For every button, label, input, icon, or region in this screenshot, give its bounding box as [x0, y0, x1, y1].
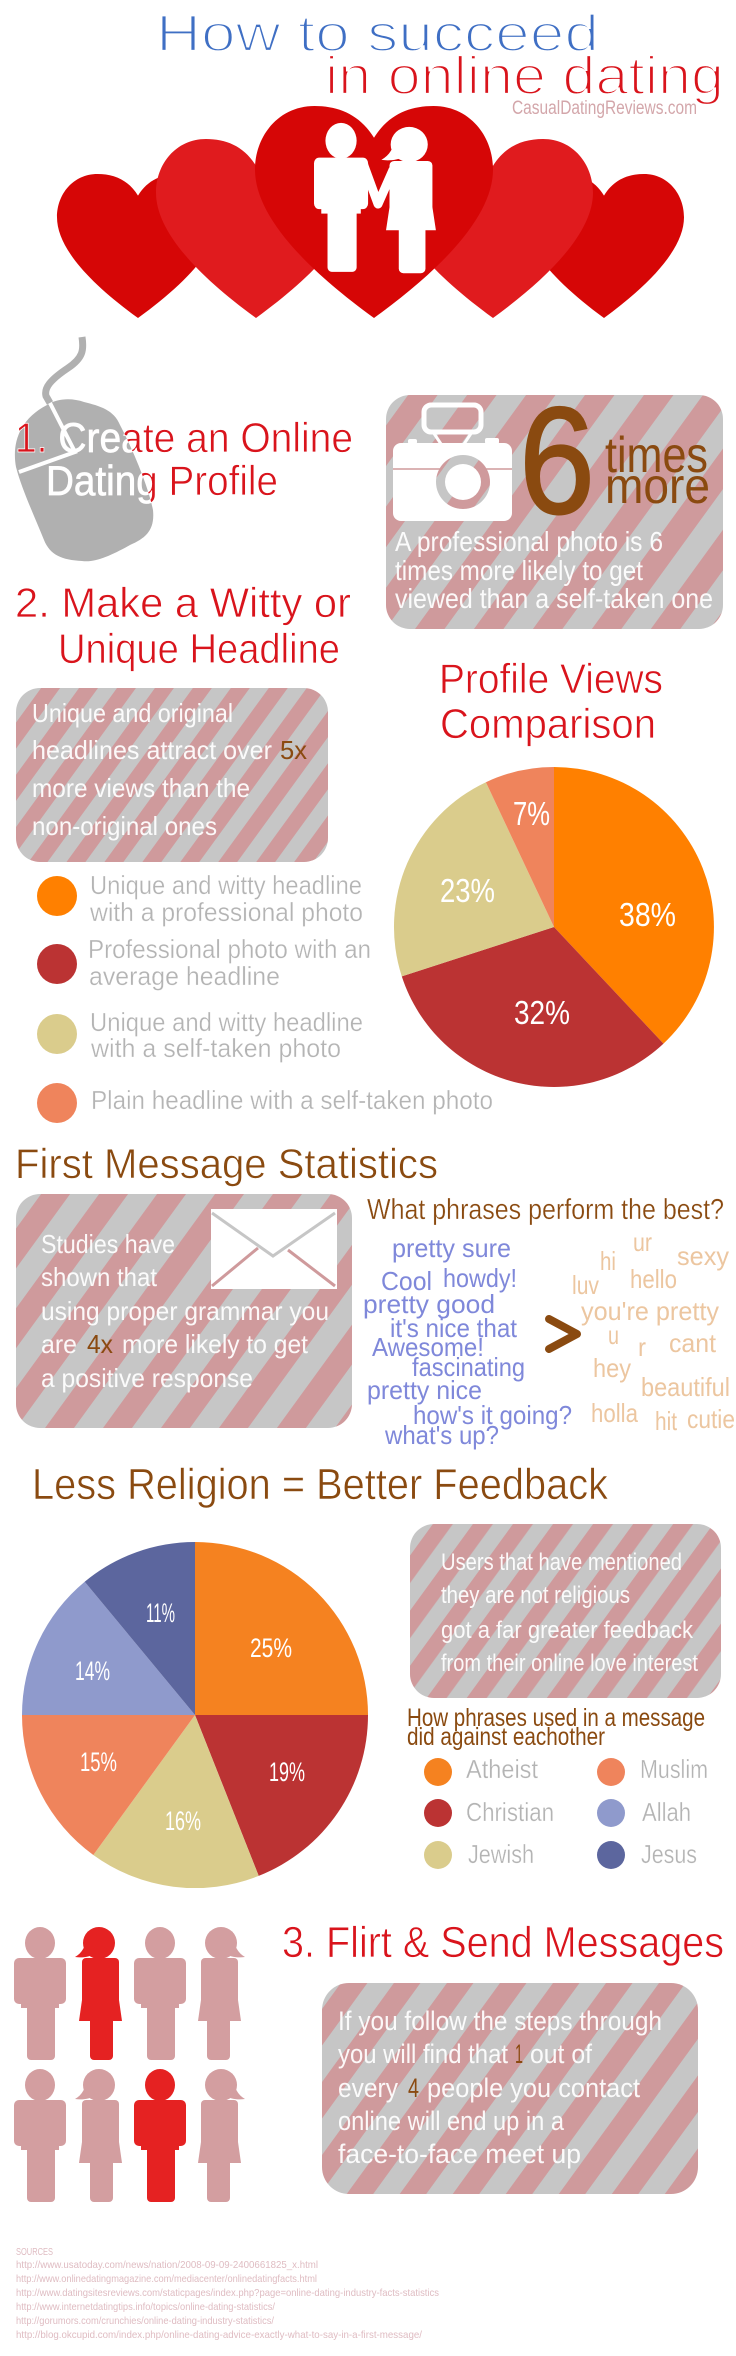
sources: http://www.onlinedatingmagazine.com/mediacenter/onlinedatingfacts.html [16, 2273, 317, 2285]
panel: grammar stat [16, 1194, 352, 1428]
text: photo description: A professional photo is 6 [395, 526, 663, 557]
panel: religion feedback: they are not religious [441, 1582, 630, 1609]
icon: greater-than chevron [549, 1319, 577, 1349]
hearts illustration with couple [57, 106, 684, 318]
legend: religion: Christian [466, 1797, 554, 1827]
panel: meet up stat: 4 [408, 2073, 419, 2103]
pie chart: profile views: 7% [513, 795, 550, 832]
legend: profile views: Unique and witty headline [90, 1007, 363, 1037]
heading: phrases comparison [407, 1704, 705, 1751]
legend: profile views: with a self-taken photo [90, 1033, 341, 1063]
panel: meet up stat: face-to-face meet up [338, 2139, 581, 2169]
icon grid: people figures, 2 of 8 highlighted [14, 1927, 245, 2202]
title [156, 5, 724, 106]
word cloud: best phrases: howdy! [443, 1263, 517, 1293]
panel: meet up stat: 1 [515, 2039, 523, 2069]
sources: SOURCES [16, 2246, 53, 2258]
word cloud: worst phrases: hi [600, 1246, 616, 1276]
legend: religion: Allah [642, 1797, 691, 1827]
text: grammar description: 4x [87, 1329, 113, 1359]
heading: profile views comparison [439, 655, 663, 747]
word cloud: best phrases: Cool [381, 1266, 432, 1296]
sources: http://gorumors.com/crunchies/online-dating-industry-statistics/ [16, 2315, 274, 2327]
icon: camera [393, 405, 512, 521]
sources: http://www.usatoday.com/news/nation/2008-09-09-2400661825_x.html [16, 2259, 318, 2271]
big number 6: 6 [519, 376, 595, 546]
heading: step 2: Unique Headline [58, 625, 340, 672]
text: grammar description: Studies have [41, 1229, 175, 1259]
panel: unique headlines stat: more views than the [32, 773, 250, 803]
icon: couple holding hands [314, 123, 436, 273]
text: photo description: times more likely to get [395, 555, 643, 586]
heart: outer left [57, 174, 219, 318]
pie chart: profile views [394, 767, 714, 1087]
heart: outer right [524, 174, 684, 318]
panel: meet up stat: every [338, 2073, 398, 2103]
heading: step 2 [15, 579, 351, 672]
word cloud: best phrases: pretty good [363, 1289, 495, 1319]
panel: unique headlines stat: headlines attract over [32, 735, 272, 765]
heart: inner left [156, 139, 356, 318]
icon: envelope [211, 1209, 337, 1289]
word cloud: worst phrases [572, 1227, 735, 1436]
heading: step 1: Dating Profile [46, 457, 278, 504]
website credit: CasualDatingReviews.com [512, 98, 697, 119]
panel: meet up stat: online will end up in a [338, 2106, 565, 2136]
panel: religion feedback [410, 1524, 721, 1698]
heart: inner right [393, 139, 593, 318]
word cloud: best phrases: fascinating [412, 1352, 525, 1382]
pie chart: religion feedback: 25% [250, 1633, 292, 1663]
text: times more [605, 427, 710, 514]
word cloud: worst phrases: cant [669, 1328, 717, 1358]
legend: profile views: average headline [89, 961, 280, 991]
pie chart: religion feedback: 14% [75, 1656, 110, 1686]
word cloud: best phrases: pretty sure [392, 1233, 511, 1263]
word cloud: worst phrases: holla [591, 1398, 638, 1428]
heading: first message statistics: First Message Statistics [15, 1140, 438, 1187]
legend: religion: Muslim [640, 1754, 708, 1784]
text: grammar description: more likely to get [122, 1329, 309, 1359]
word cloud: best phrases: it's nice that [390, 1313, 518, 1343]
panel: meet up stat: If you follow the steps through [338, 2006, 662, 2036]
panel: meet up stat: you will find that [338, 2039, 508, 2069]
pie chart: religion feedback: 15% [80, 1747, 117, 1777]
panel: religion feedback: Users that have mentioned [441, 1549, 682, 1576]
word cloud: worst phrases: sexy [677, 1241, 729, 1271]
panel: unique headlines stat: Unique and original [32, 698, 233, 728]
sources: http://blog.okcupid.com/index.php/online-dating-advice-exactly-what-to-say-in-a-first-message/ [16, 2329, 422, 2341]
legend: profile views: Plain headline with a self-taken photo [91, 1085, 493, 1115]
title: in online dating [325, 46, 724, 106]
word cloud: worst phrases: hey [593, 1353, 631, 1383]
legend: profile views: Unique and witty headline [90, 870, 362, 900]
heading: step 2: 2. Make a Witty or [15, 579, 351, 626]
word cloud: worst phrases: hit [655, 1406, 678, 1436]
word cloud: worst phrases: r [638, 1332, 646, 1362]
text: grammar description: a positive response [41, 1363, 253, 1393]
heading: step 1: 1. Create an Online [15, 414, 353, 461]
word cloud: worst phrases: hello [630, 1264, 677, 1294]
title: How to succeed [156, 5, 599, 63]
sources [16, 2246, 439, 2341]
word cloud: best phrases: Awesome! [372, 1332, 484, 1362]
heart: centre [255, 106, 493, 318]
icon: computer mouse [15, 337, 153, 561]
panel: unique headlines stat: 5x [280, 735, 307, 765]
heading: step 1 [15, 414, 353, 504]
heading: step 1: Dating Profile [46, 457, 278, 504]
panel: meet up stat: out of [530, 2039, 592, 2069]
heading: profile views comparison: Profile Views [439, 655, 663, 702]
pie chart: religion feedback: 16% [165, 1806, 201, 1836]
text: times more: more [605, 458, 710, 514]
pie chart: religion feedback [22, 1542, 368, 1888]
panel: meet up stat [322, 1983, 698, 2194]
word cloud: worst phrases: you're pretty [581, 1296, 719, 1326]
heading: profile views comparison: Comparison [440, 700, 656, 747]
panel: unique headlines stat: non-original ones [32, 811, 217, 841]
word cloud: best phrases [363, 1233, 572, 1450]
heading: phrases comparison: did against eachother [407, 1723, 605, 1751]
legend: religion: Jewish [468, 1839, 534, 1869]
text: grammar description: are [41, 1329, 77, 1359]
pie chart: profile views: 38% [619, 896, 676, 933]
legend: religion: Jesus [641, 1839, 697, 1869]
sources: http://www.datingsitesreviews.com/staticpages/index.php?page=online-dating-industry-facts-statistics [16, 2287, 439, 2299]
legend: profile views: with a professional photo [89, 897, 363, 927]
panel: professional photo stat [386, 376, 723, 629]
heading: less religion: Less Religion = Better Feedback [32, 1460, 609, 1509]
pie chart: profile views: 32% [514, 994, 570, 1031]
legend: profile views [37, 870, 493, 1123]
word cloud: worst phrases: ur [633, 1227, 652, 1257]
text: grammar description: shown that [41, 1262, 158, 1292]
panel: meet up stat: people you contact [427, 2073, 640, 2103]
word cloud: best phrases: what's up? [384, 1420, 499, 1450]
legend: profile views: Professional photo with an [88, 934, 371, 964]
word cloud: best phrases: how's it going? [413, 1400, 572, 1430]
heading: step 1: 1. Create an Online [15, 414, 353, 461]
text: grammar description [41, 1229, 329, 1393]
pie chart: religion feedback: 11% [146, 1598, 175, 1628]
text: photo description [395, 526, 713, 614]
word cloud: worst phrases: u [608, 1320, 619, 1350]
text: times more: times [605, 427, 708, 483]
sources: http://www.internetdatingtips.info/topics/online-dating-statistics/ [16, 2301, 275, 2313]
legend: religion: Atheist [466, 1754, 539, 1784]
legend: religion [424, 1754, 708, 1869]
word cloud: worst phrases: luv [572, 1270, 599, 1300]
pie chart: religion feedback: 19% [269, 1757, 305, 1787]
panel: religion feedback: got a far greater feedback [441, 1617, 694, 1644]
text: grammar description: using proper grammar you [41, 1296, 329, 1326]
panel: unique headlines stat [16, 688, 328, 862]
pie chart: profile views: 23% [440, 872, 495, 909]
word cloud: best phrases: pretty nice [367, 1375, 482, 1405]
